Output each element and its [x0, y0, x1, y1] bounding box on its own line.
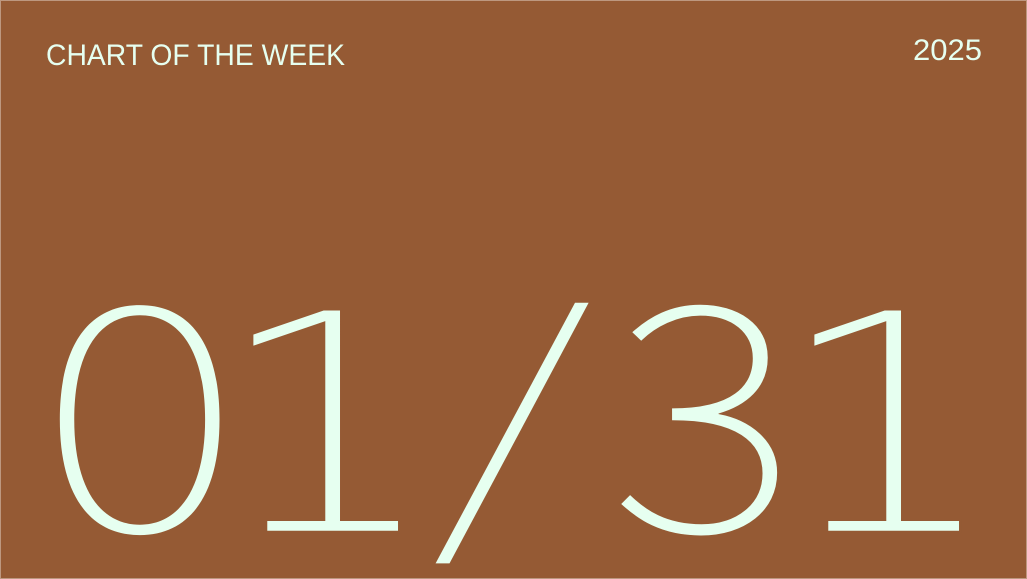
year: 2025	[913, 34, 982, 67]
date	[38, 166, 1002, 579]
heading: CHART OF THE WEEK	[46, 39, 345, 72]
